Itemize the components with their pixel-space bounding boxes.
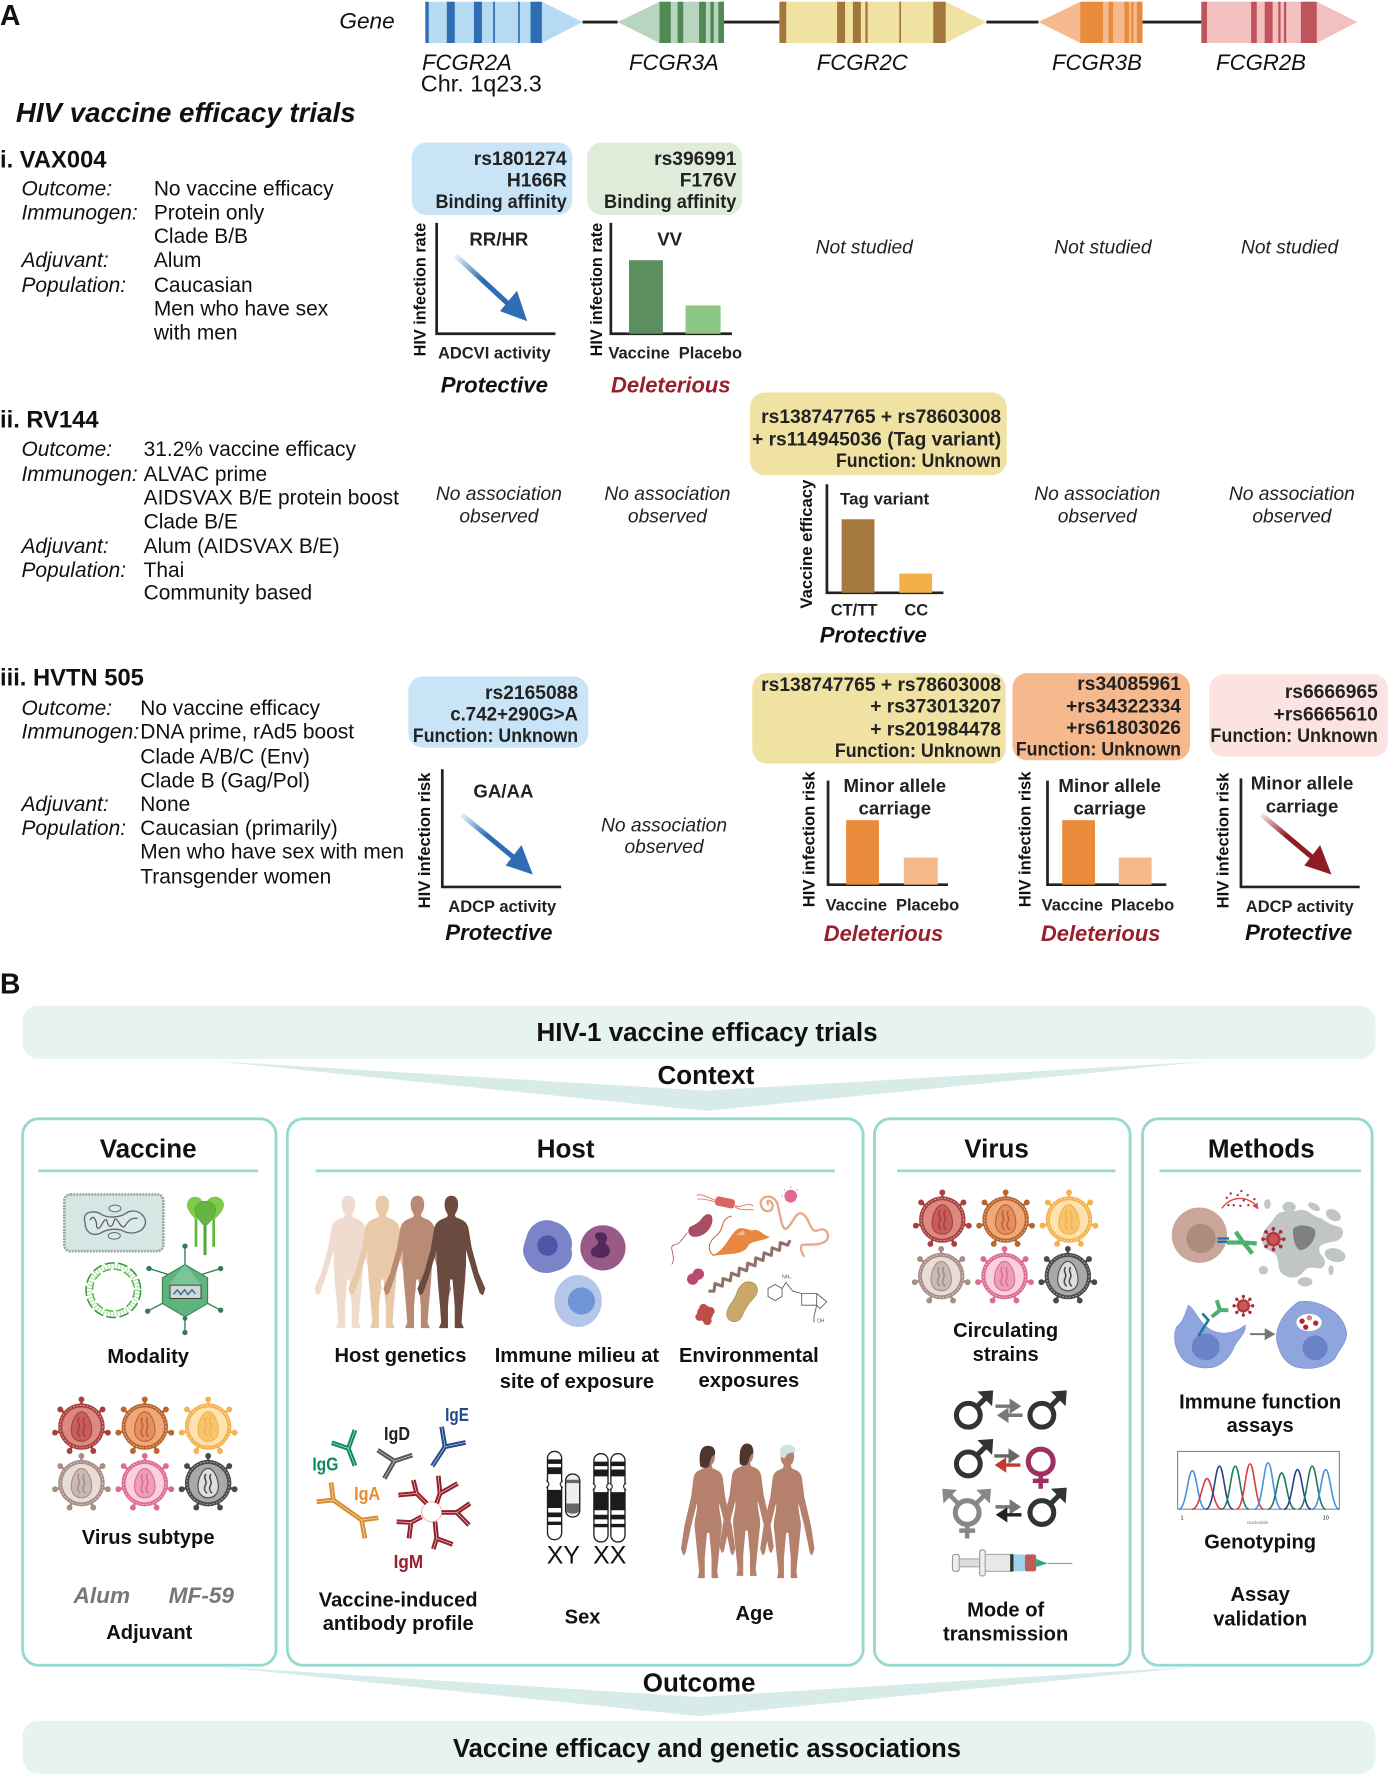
no association notes RV144: observed [628, 507, 708, 528]
banner: HIV-1 vaccine efficacy trials [23, 1006, 1376, 1059]
variant box HVTN FCGR3B: +rs61803026 [1066, 718, 1181, 739]
arrow: decreasing [456, 256, 527, 321]
adjuvant names [73, 1583, 234, 1608]
antibody IgA [317, 1482, 380, 1538]
label: immune function assays: Immune function [1179, 1391, 1341, 1413]
banner: vaccine efficacy and genetic associations: Vaccine efficacy and genetic associations [453, 1733, 961, 1763]
trial field values: with men [153, 321, 237, 344]
trial field values: ALVAC prime [144, 463, 267, 486]
trial field values: None [140, 793, 190, 816]
icon: chromosomes: XY [547, 1541, 580, 1569]
chart: FCGR3B minor allele: Minor allele [1058, 775, 1161, 796]
heading: host: Host [537, 1133, 595, 1163]
gene FCGR2A [425, 2, 583, 43]
label: circulating strains: Circulating [953, 1320, 1058, 1342]
trial name: ii. RV144 [0, 407, 99, 434]
variant box rs1801274: H166R [507, 171, 567, 192]
label: context: Context [657, 1060, 755, 1090]
variant box HVTN FCGR2C: + rs201984478 [870, 719, 1001, 740]
chart: tag variant vaccine efficacy [797, 479, 943, 619]
heading: virus: Virus [964, 1133, 1029, 1163]
icon: diverse people [314, 1196, 485, 1328]
trial field names: Adjuvant: [19, 793, 109, 816]
heading: HIV vaccine efficacy trials: HIV vaccine efficacy trials [16, 97, 356, 128]
antibody IgG [312, 1430, 355, 1475]
icon: chromosomes [546, 1451, 627, 1569]
label: environmental exposures [679, 1345, 819, 1392]
icon: viral vector [145, 1243, 223, 1335]
icon: antibody isotypes [312, 1405, 470, 1572]
icon: chemical structure [768, 1274, 827, 1325]
trial field values [153, 178, 334, 344]
chart: FCGR2C minor allele: HIV infection risk [799, 771, 818, 907]
panel: virus [874, 1119, 1130, 1665]
chevron: context [215, 1061, 1210, 1111]
trial field values: AIDSVAX B/E protein boost [144, 487, 399, 510]
trial field names: Population: [21, 817, 126, 840]
trial ii: RV144 text [0, 407, 399, 605]
gene FCGR3A [618, 2, 724, 43]
verdict: deleterious: Deleterious [611, 373, 731, 398]
trial field names: Population: [21, 274, 126, 297]
chart: GA/AA ADCP [415, 769, 561, 916]
icon: pink virus [781, 1187, 800, 1205]
trial field names [19, 438, 138, 582]
trial field values: Alum [154, 249, 201, 272]
icon: phagocytosis assay [1175, 1295, 1347, 1368]
chart: RR/HR ADCVI: ADCVI activity [438, 345, 552, 363]
chart: FCGR3B minor allele: carriage [1073, 798, 1146, 819]
chevron: outcome [215, 1666, 1199, 1716]
label: immune function assays [1179, 1391, 1341, 1437]
no association note HVTN [601, 816, 727, 858]
chart: FCGR2C minor allele: Minor allele [843, 775, 946, 796]
icon: fc receptor and antibody [1217, 1232, 1257, 1253]
not studied notes: Not studied [1054, 237, 1153, 258]
chart: VV vaccine vs placebo [587, 223, 742, 363]
verdict: protective: Protective [441, 373, 548, 398]
trial field values: Clade B/B [154, 225, 248, 248]
variant box rs2165088: c.742+290G>A [450, 705, 578, 726]
icon: circulating strains [912, 1189, 1098, 1303]
trial i: VAX004 text [0, 146, 334, 344]
variant box rs396991: rs396991 [654, 149, 737, 170]
trial field values: 31.2% vaccine efficacy [144, 438, 356, 461]
chart: FCGR2B ADCP: ADCP activity [1246, 898, 1355, 916]
variant box rs2165088: Function: Unknown [413, 726, 578, 747]
icon: virus [1261, 1227, 1286, 1251]
chart: VV vaccine vs placebo: HIV infection rate [587, 223, 606, 356]
variant box RV144 FCGR2C [750, 393, 1007, 475]
variant box rs1801274: Binding affinity [436, 192, 567, 213]
variant box HVTN FCGR3B [1012, 673, 1190, 761]
antibody IgE: IgE [445, 1405, 469, 1425]
trial field values [140, 697, 404, 889]
icon: virus [1232, 1295, 1254, 1317]
icon: virus subtypes [52, 1396, 238, 1511]
gene names [422, 50, 1306, 75]
trial field names [19, 178, 138, 297]
label: adjuvant: Adjuvant [106, 1622, 193, 1644]
not studied notes: Not studied [1241, 237, 1339, 258]
trial field values: Transgender women [140, 866, 331, 889]
variant box RV144 FCGR2C: Function: Unknown [836, 451, 1001, 472]
arrow: decreasing [462, 815, 533, 874]
chart: GA/AA ADCP: HIV infection risk [415, 772, 434, 908]
chart: FCGR3B minor allele: HIV infection risk [1016, 771, 1035, 907]
chart: FCGR2C minor allele: carriage [858, 798, 931, 819]
chart: tag variant vaccine efficacy: Tag variant [840, 490, 930, 509]
verdict: deleterious: Deleterious [824, 921, 943, 946]
antibody IgE [432, 1405, 469, 1466]
chromosome location: Chr. 1q23.3 [421, 71, 542, 97]
chart: VV vaccine vs placebo: VV [657, 228, 683, 249]
no association notes RV144 [436, 484, 1355, 528]
no association notes RV144: No association [1229, 484, 1355, 505]
panel: vaccine [23, 1119, 276, 1665]
variant box rs1801274: rs1801274 [474, 149, 567, 170]
trial field names: Outcome: [21, 178, 112, 201]
trial field values: Caucasian (primarily) [140, 817, 338, 840]
arrow: engulfment [1250, 1330, 1273, 1339]
icon: chromosomes: XX [593, 1541, 627, 1569]
label: immune function assays: assays [1227, 1415, 1294, 1437]
trial field names: Immunogen: [21, 463, 138, 486]
variant box rs2165088: rs2165088 [485, 683, 578, 704]
icon: plasmid [86, 1263, 141, 1318]
label: circulating strains [953, 1320, 1058, 1366]
verdict: protective: Protective [1245, 920, 1352, 945]
variant box rs2165088 [408, 677, 588, 748]
chart: sequencing chromatogram: Nucleotide [1247, 1520, 1269, 1525]
heading: vaccine: Vaccine [100, 1133, 197, 1163]
verdict: protective: Protective [820, 623, 927, 648]
trial field values: Protein only [154, 201, 265, 224]
chart: RR/HR ADCVI: HIV infection rate [410, 223, 429, 356]
antibody IgG: IgG [312, 1455, 338, 1475]
not studied notes: Not studied [816, 237, 914, 258]
icon: receptor and antibody [1198, 1300, 1228, 1336]
trial field names: Population: [21, 559, 126, 582]
trial field values: Men who have sex with men [140, 841, 404, 864]
label: modality: Modality [107, 1346, 190, 1368]
gene FCGR2C [779, 2, 986, 43]
adjuvant names: MF-59 [169, 1583, 234, 1608]
icon: environmental exposures [672, 1187, 828, 1325]
gene names: FCGR3A [629, 50, 719, 75]
verdict: deleterious: Deleterious [1041, 921, 1160, 946]
chart: RR/HR ADCVI [410, 223, 555, 363]
icon: trypanosome [709, 1216, 770, 1256]
chart: FCGR2B ADCP [1213, 772, 1360, 916]
variant box HVTN FCGR2C: rs138747765 + rs78603008 [761, 675, 1001, 696]
icon: spirochete [708, 1240, 790, 1291]
antibody IgD: IgD [384, 1424, 410, 1444]
label: vaccine-induced antibody profile: antibody profile [323, 1613, 474, 1635]
label: environmental exposures: exposures [699, 1370, 799, 1392]
no association notes RV144: No association [1034, 484, 1160, 505]
chart: FCGR2B ADCP: HIV infection risk [1213, 772, 1232, 908]
trial field names: Adjuvant: [19, 249, 109, 272]
label: virus subtype: Virus subtype [82, 1527, 215, 1549]
label: genotyping: Genotyping [1204, 1532, 1316, 1554]
gene label: Gene [339, 8, 395, 33]
trial field values: Thai [144, 559, 184, 582]
variant box rs396991 [587, 143, 742, 215]
icon: allergen cluster [695, 1304, 715, 1325]
trial field values: Clade A/B/C (Env) [140, 746, 310, 769]
icon: immune cells [523, 1220, 626, 1327]
antibody IgA: IgA [354, 1484, 380, 1504]
icon: helminth [761, 1197, 828, 1257]
chart: sequencing chromatogram: 1 [1181, 1515, 1184, 1521]
trial field names: Immunogen: [21, 721, 139, 744]
variant box HVTN FCGR2B: +rs6665610 [1274, 705, 1378, 726]
trial field values: No vaccine efficacy [140, 697, 321, 720]
icon: transgender to male transmission [942, 1488, 1067, 1539]
panel: methods [1143, 1119, 1372, 1665]
chart: FCGR2C minor allele: Vaccine [826, 897, 887, 915]
variant box HVTN FCGR3B: Function: Unknown [1016, 740, 1181, 761]
chart: GA/AA ADCP: GA/AA [473, 781, 533, 802]
variant box RV144 FCGR2C: + rs114945036 (Tag variant) [752, 430, 1001, 451]
gene names: FCGR3B [1052, 50, 1142, 75]
verdict: protective: Protective [445, 920, 552, 945]
trial field values: Caucasian [154, 274, 253, 297]
trial field names: Immunogen: [21, 201, 138, 224]
trial field values: Men who have sex [154, 298, 329, 321]
trial field values: Clade B/E [144, 510, 238, 533]
variant box HVTN FCGR2B: Function: Unknown [1210, 726, 1378, 747]
chart: tag variant vaccine efficacy: CC [904, 601, 928, 619]
variant box HVTN FCGR2B: rs6666965 [1285, 682, 1378, 703]
icon: ADCC assay [1172, 1190, 1347, 1286]
chart: FCGR3B minor allele: Vaccine [1042, 897, 1103, 915]
icon: effector cell [1172, 1207, 1227, 1263]
trial field values: DNA prime, rAd5 boost [140, 721, 354, 744]
panel letter B: B [0, 967, 20, 999]
label: mode of transmission [943, 1600, 1068, 1645]
trial iii: HVTN 505 text [0, 665, 404, 889]
trial field names [19, 697, 139, 840]
trial name: iii. HVTN 505 [0, 665, 144, 692]
chart: VV vaccine vs placebo: Vaccine [608, 345, 670, 363]
chart: FCGR2B ADCP: carriage [1266, 795, 1338, 816]
no association notes RV144: No association [604, 484, 730, 505]
chart: VV vaccine vs placebo: Placebo [679, 345, 742, 363]
variant box HVTN FCGR2B [1209, 674, 1388, 757]
no association notes RV144: observed [1252, 507, 1333, 528]
icon: cytotoxic granules [1222, 1190, 1258, 1209]
trial field names: Outcome: [21, 697, 112, 720]
no association note HVTN: observed [624, 837, 705, 858]
gene names: FCGR2A [422, 50, 512, 75]
icon: bacterium [672, 1214, 712, 1264]
label: host genetics: Host genetics [334, 1345, 466, 1367]
no association notes RV144: observed [459, 507, 540, 528]
label: sex: Sex [565, 1606, 601, 1628]
label: assay validation [1213, 1584, 1307, 1631]
icon: phagocyte engulfing [1175, 1305, 1245, 1368]
trial field names: Outcome: [21, 438, 112, 461]
variant box HVTN FCGR3B: +rs34322334 [1066, 697, 1181, 718]
chart: GA/AA ADCP: ADCP activity [448, 898, 557, 916]
chart: FCGR2C minor allele [799, 771, 959, 915]
not studied notes [816, 237, 1339, 258]
label: vaccine-induced antibody profile [319, 1589, 478, 1635]
label: outcome: Outcome [643, 1667, 755, 1697]
icon: chemical structure: OH [817, 1319, 825, 1325]
trial field values: No vaccine efficacy [154, 178, 334, 201]
variant box HVTN FCGR2C [752, 673, 1006, 764]
chart: FCGR3B minor allele: Placebo [1111, 897, 1174, 915]
variant box HVTN FCGR3B: rs34085961 [1077, 674, 1181, 695]
adjuvant names: Alum [73, 1583, 130, 1608]
icon: syringe [952, 1550, 1072, 1576]
variant box rs396991: Binding affinity [604, 192, 737, 213]
icon: women of different ages [681, 1444, 814, 1578]
label: mode of transmission: Mode of [967, 1600, 1045, 1622]
icon: protein chip [64, 1194, 163, 1251]
chart: tag variant vaccine efficacy: CT/TT [831, 601, 877, 619]
icon: flagellated microbe [697, 1195, 753, 1210]
icon: coccus pair [687, 1268, 704, 1285]
gene names: FCGR2C [817, 50, 909, 75]
arrow: decreasing [1261, 815, 1331, 874]
label: mode of transmission: transmission [943, 1623, 1068, 1645]
no association note HVTN: No association [601, 816, 727, 837]
chart: FCGR3B minor allele [1016, 771, 1174, 915]
variant box HVTN FCGR2C: + rs373013207 [870, 697, 1001, 718]
label: circulating strains: strains [973, 1344, 1039, 1366]
label: assay validation: validation [1213, 1609, 1307, 1631]
variant box RV144 FCGR2C: rs138747765 + rs78603008 [761, 407, 1001, 428]
panel: host [287, 1119, 863, 1665]
trial field values: Community based [144, 582, 312, 605]
antibody IgD [378, 1424, 412, 1478]
chart: sequencing chromatogram: 10 [1323, 1515, 1329, 1521]
banner: vaccine efficacy and genetic associations [23, 1721, 1376, 1774]
gene connector lines [583, 21, 1201, 23]
no association notes RV144: No association [436, 484, 562, 505]
icon: peanut [727, 1282, 757, 1322]
label: vaccine-induced antibody profile: Vaccine-induced [319, 1589, 478, 1611]
icon: vaccine modalities [64, 1194, 224, 1335]
gene FCGR2B [1201, 2, 1357, 43]
label: assay validation: Assay [1231, 1584, 1291, 1606]
chart: FCGR2C minor allele: Placebo [896, 897, 959, 915]
antibody IgM [394, 1476, 470, 1572]
variant box rs1801274 [412, 143, 572, 215]
trial field values: Clade B (Gag/Pol) [140, 769, 310, 792]
banner: HIV-1 vaccine efficacy trials: HIV-1 vaccine efficacy trials [536, 1017, 878, 1047]
antibody IgM: IgM [394, 1552, 423, 1572]
gene names: FCGR2B [1216, 50, 1306, 75]
label: immune milieu [495, 1345, 659, 1393]
chart: tag variant vaccine efficacy: Vaccine efficacy [797, 479, 816, 609]
no association notes RV144: observed [1058, 507, 1138, 528]
trial name: i. VAX004 [0, 146, 107, 173]
label: age: Age [736, 1603, 774, 1625]
chart: FCGR2B ADCP: Minor allele [1251, 773, 1353, 794]
icon: male to male transmission [956, 1390, 1067, 1427]
trial field names: Adjuvant: [19, 535, 109, 558]
label: immune milieu: Immune milieu at [495, 1345, 659, 1367]
heading: methods: Methods [1208, 1133, 1315, 1163]
icon: chemical structure: NH₂ [782, 1274, 791, 1280]
gene FCGR3B [1038, 2, 1143, 43]
icon: protein trimer [187, 1197, 224, 1255]
icon: target cell [1259, 1199, 1347, 1286]
variant box HVTN FCGR2C: Function: Unknown [835, 741, 1001, 762]
chart: sequencing chromatogram [1178, 1451, 1339, 1525]
trial field values [144, 438, 399, 605]
chart: RR/HR ADCVI: RR/HR [469, 228, 529, 249]
trial field values: Alum (AIDSVAX B/E) [144, 535, 340, 558]
variant box rs396991: F176V [680, 171, 737, 192]
icon: phagocyte with vesicle [1276, 1301, 1347, 1368]
icon: male to female transmission [956, 1439, 1053, 1489]
gene track [339, 2, 1357, 97]
label: immune milieu: site of exposure [500, 1371, 654, 1393]
label: environmental exposures: Environmental [679, 1345, 819, 1367]
